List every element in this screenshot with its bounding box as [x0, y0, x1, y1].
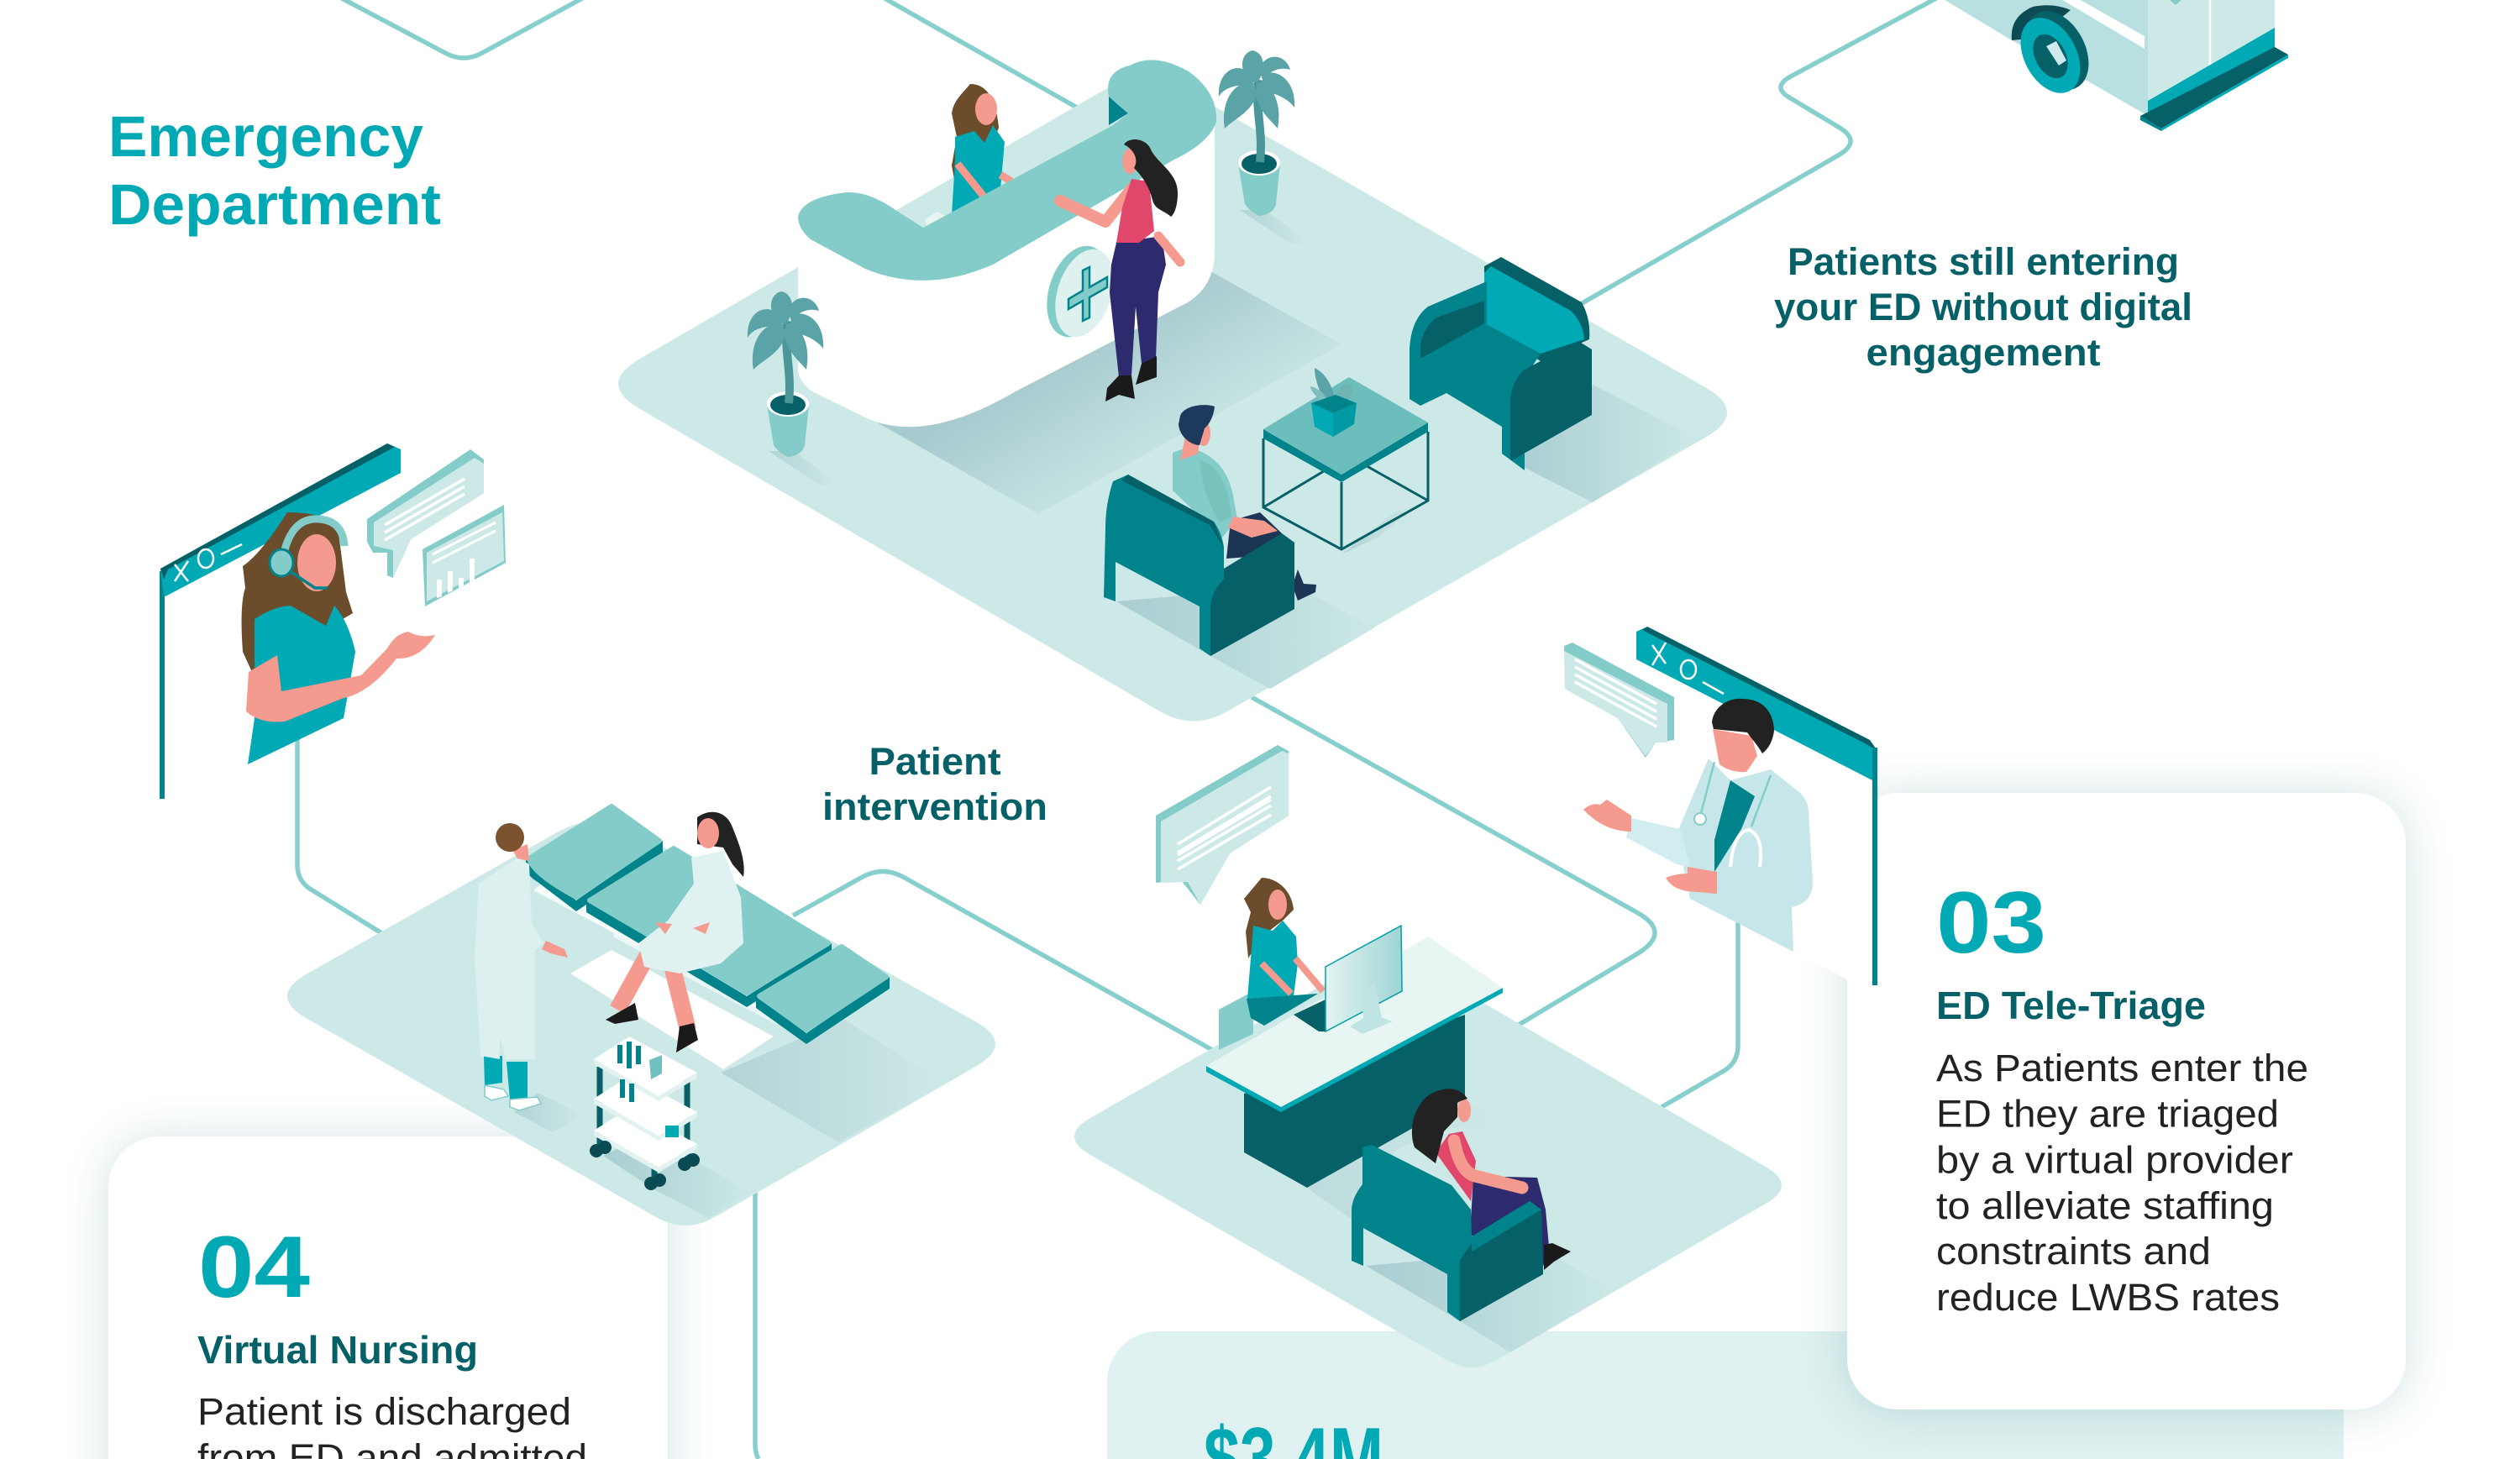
card 04 number: 04: [198, 1219, 310, 1316]
monitor: [1326, 926, 1402, 1031]
receptionist nurse: [952, 84, 1011, 215]
caption: patients entering: engagement: [1866, 331, 2101, 374]
title: Department: [108, 172, 441, 237]
card 04 heading: Virtual Nursing: [197, 1328, 478, 1372]
armchair shadows: [1510, 385, 1698, 502]
speech bubble: doctor: [1564, 643, 1674, 758]
plant right: [1219, 50, 1311, 244]
floor: triage: [1074, 957, 1782, 1367]
panel: savings summary: [1107, 1331, 2344, 1459]
card 03: [1847, 793, 2406, 1411]
woman in pink at reception: [1060, 139, 1180, 401]
desk nurse: [1244, 878, 1323, 1026]
caption: patients entering: your ED without digital: [1774, 286, 2192, 328]
seated man: [1173, 405, 1316, 601]
agent: [242, 512, 435, 764]
card 03 body: ED they are triaged: [1936, 1092, 2279, 1136]
coffee table: [1263, 368, 1428, 549]
plant left: [748, 291, 840, 485]
nurse agent video window: [160, 443, 435, 799]
title: [108, 104, 441, 237]
card 03 heading: ED Tele-Triage: [1936, 984, 2206, 1027]
card 03 body: reduce LWBS rates: [1936, 1276, 2280, 1319]
floor: emergency lobby: [618, 79, 1727, 721]
card 03 body: As Patients enter the: [1936, 1047, 2308, 1089]
wheel: [2013, 0, 2102, 101]
card 03 body: [1936, 1047, 2308, 1319]
card 03 number: 03: [1936, 874, 2046, 972]
desk top: [798, 60, 1216, 281]
card 04: [108, 1136, 668, 1459]
shadows: [721, 1020, 945, 1142]
window side: [1872, 748, 1877, 985]
card 04 body: Patient is discharged: [197, 1390, 571, 1433]
card 03 body: by a virtual provider: [1936, 1139, 2293, 1181]
desk floor shadow: [873, 271, 1341, 514]
caption: patient intervention: Patient: [869, 740, 1001, 783]
card 04 body: [197, 1390, 587, 1459]
cushions: [526, 841, 663, 911]
speech bubble: nurse: [1156, 745, 1289, 905]
card 03 body: to alleviate staffing: [1936, 1184, 2274, 1227]
card 03 body: constraints and: [1936, 1230, 2211, 1273]
caption: patients entering: [1774, 240, 2192, 374]
doctor video window: [1583, 627, 1877, 994]
exam bed: [526, 806, 890, 1069]
medical cart: [590, 1037, 700, 1190]
report card icon: [423, 505, 506, 606]
ambulance: [1942, 0, 2288, 131]
seated patient: [606, 812, 744, 1052]
connector lines: [297, 0, 1936, 1459]
reception desk: [798, 60, 1216, 427]
caption: patient intervention: [822, 740, 1047, 828]
keyboard: [1294, 1000, 1326, 1031]
doctor: [1583, 699, 1813, 952]
triage desk with nurse: [1206, 878, 1503, 1188]
title: Emergency: [108, 104, 423, 169]
doctor standing: [475, 823, 568, 1110]
icon: medical plus sign: [1036, 238, 1124, 345]
armchair right: [1410, 257, 1592, 470]
table plant: [1310, 368, 1357, 437]
speech bubble: agent: [367, 449, 484, 578]
caption: patient intervention: intervention: [822, 785, 1047, 828]
seated woman and armchair: [1352, 1089, 1571, 1321]
armchair front: [1104, 475, 1294, 656]
window bar: [1636, 627, 1877, 780]
caption: patients entering: Patients still entering: [1788, 240, 2179, 283]
floor: virtual nursing: [287, 821, 995, 1225]
